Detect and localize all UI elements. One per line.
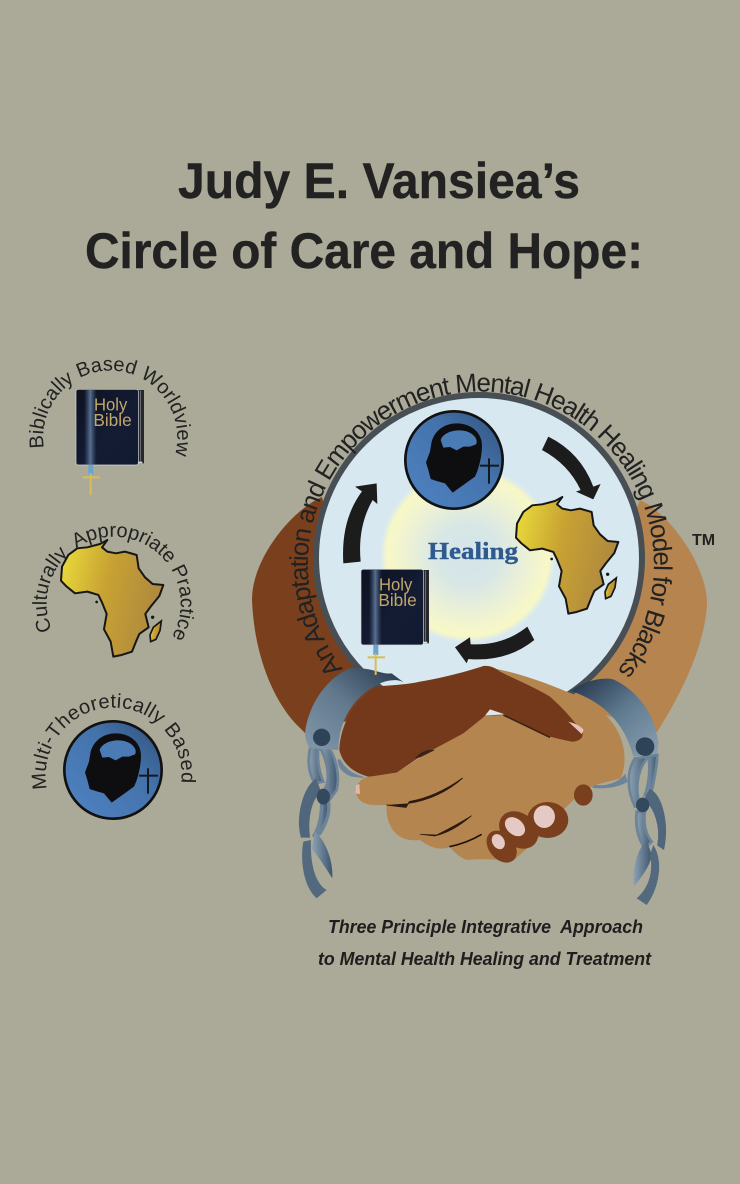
title: Judy E. Vansiea’s [178,153,580,209]
icon group: multi-theoretically based [32,693,196,820]
icon: holy bible: Bible [93,410,132,430]
centre label: healing: Healing [428,539,518,565]
caption: Three Principle Integrative Approach [328,917,643,937]
icon: holy bible [76,389,144,495]
arm: dark left arm [252,497,420,733]
title [85,153,643,279]
icon: africa in circle [516,497,618,614]
arm: tan right arm [560,500,707,732]
fingertips [480,784,593,869]
handshake [339,666,625,869]
icon: holy bible in circle: Holy [379,575,412,595]
ring title: curved text: An Adaptation and Empowerment Mental Health Healing Model for Blacks [289,374,673,677]
tan hand [356,668,625,861]
handshake details [355,709,584,847]
caption: to Mental Health Healing and Treatment [318,949,652,969]
icon group: culturally appropriate practice [32,526,194,658]
healing circle [316,395,642,721]
icon group: biblically based worldview [28,360,191,495]
arrow: africa to bible [455,627,534,663]
icon: head with cross [64,721,162,819]
icon: holy bible: Holy [94,395,127,415]
icon: map of africa [61,540,163,657]
curved label: culturally appropriate practice: Culturally Appropriate Practice [32,526,194,640]
title: Circle of Care and Hope: [85,223,643,279]
left shackle and chain [300,668,405,898]
trademark: TM [692,532,715,549]
right shackle and chain [570,679,665,905]
caption [318,917,652,969]
icon: head with cross in circle [405,411,503,509]
arrow: head to africa [542,437,601,499]
curved label: multi-theoretically based: Multi-Theoretically Based [32,693,196,789]
icon: holy bible in circle [361,569,429,675]
dark hand [339,666,583,777]
arrow: bible to head [343,483,377,563]
icon: holy bible in circle: Bible [378,590,417,610]
curved label: biblically based worldview: Biblically Based Worldview [28,360,191,457]
